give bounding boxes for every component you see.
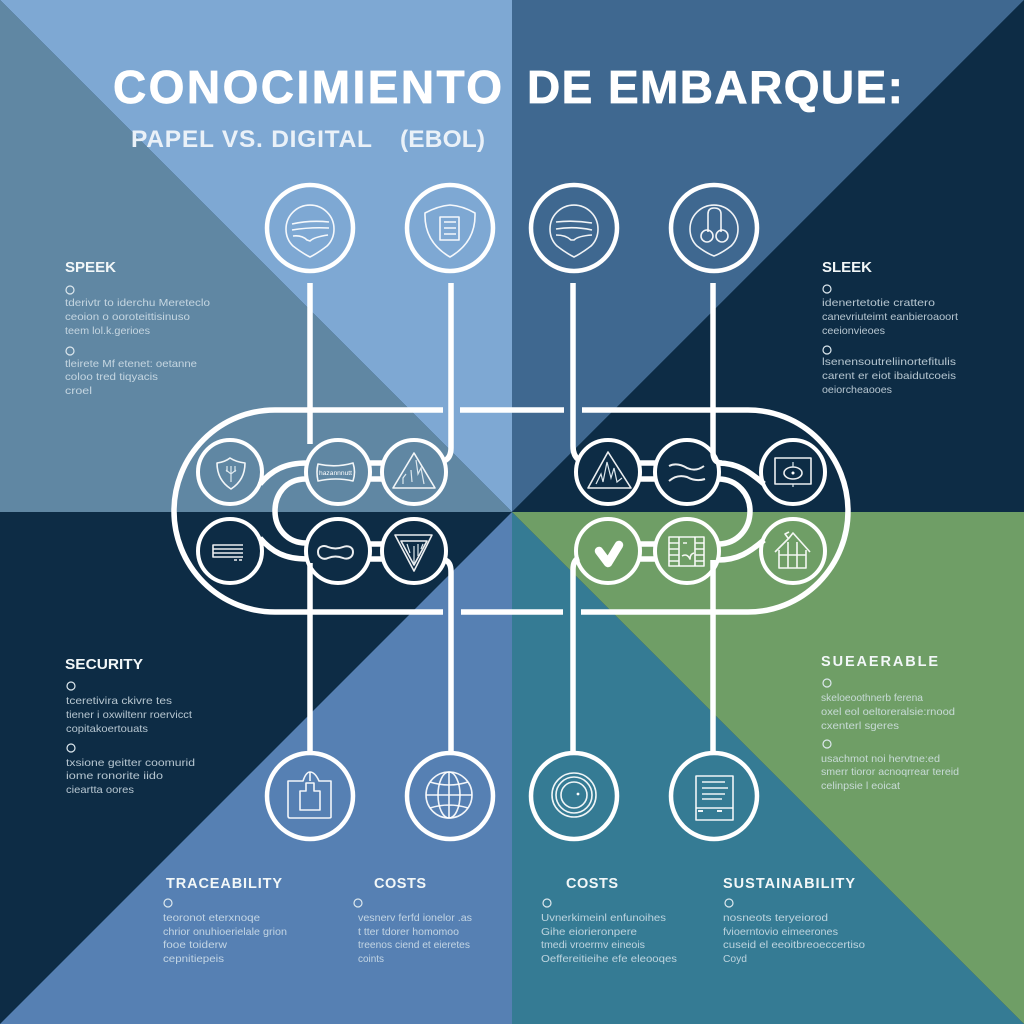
body text: nosneots teryeiorod (723, 912, 828, 924)
body text (163, 912, 287, 965)
body text (821, 692, 959, 792)
body text: tderivtr to iderchu Mereteclo (65, 297, 210, 309)
body text: teem lol.k.gerioes (65, 325, 150, 337)
heading: speek: SPEEK (65, 260, 117, 276)
heading: sleek: SLEEK (822, 260, 873, 276)
subtitle (131, 126, 485, 153)
icon: bottom circle 2, globe (407, 753, 493, 839)
inner curved links (260, 463, 764, 560)
body text (822, 297, 958, 396)
bullet icon (164, 899, 172, 907)
body text: tleirete Mf etenet: oetanne (65, 358, 197, 370)
title (113, 61, 903, 113)
body text: iome ronorite iido (66, 770, 163, 782)
body text (541, 912, 677, 965)
body text: lsenensoutreliinortefitulis (822, 356, 956, 368)
icon: circle F1, framed screen (761, 440, 825, 504)
icon: circle B2, link shape (306, 519, 370, 583)
panel: speek (65, 260, 210, 397)
icon: top circle 2, shield with document (407, 185, 493, 271)
heading: costs: COSTS (374, 876, 426, 892)
body text: cxenterl sgeres (821, 720, 899, 732)
body text: carent er eiot ibaidutcoeis (822, 370, 956, 382)
body text: smerr tioror acnoqrrear tereid (821, 766, 959, 778)
body text: Coyd (723, 953, 747, 965)
icon: bottom circle 4, document (671, 753, 757, 839)
icon: circle C2, inverted triangle (382, 519, 446, 583)
icon: top circle 3, document pin (531, 185, 617, 271)
panel: sustainability (723, 876, 865, 965)
title: CONOCIMIENTO (113, 61, 502, 113)
body text: tmedi vroermv eineois (541, 939, 645, 951)
body text: t tter tdorer homomoo (358, 926, 459, 938)
subtitle: PAPEL VS. DIGITAL (131, 126, 372, 153)
body text: ceeionvieoes (822, 325, 885, 337)
icon: circle D2, check mark (576, 519, 640, 583)
icon: circle A2, bars (198, 519, 262, 583)
bullet icon (725, 899, 733, 907)
icon: circle E1, waves (655, 440, 719, 504)
body text: treenos ciend et eieretes (358, 939, 470, 951)
bullet icons (823, 679, 831, 748)
heading: costs: COSTS (566, 876, 618, 892)
body text: croel (65, 385, 92, 397)
body text: oeiorcheaooes (822, 384, 892, 396)
icon: bottom circle 1, box on tag (267, 753, 353, 839)
body text: cepnitiepeis (163, 953, 224, 965)
icon: top circle 1, document pin (267, 185, 353, 271)
body text: cieartta oores (66, 784, 134, 796)
icon: circle C1, warning triangle (382, 440, 446, 504)
icon: circle B1, banner: hazannnutt (319, 470, 352, 477)
body text: skeloeoothnerb ferena (821, 692, 923, 704)
icon: circle B1, banner (306, 440, 370, 504)
icon: circle D1, warning triangle (576, 440, 640, 504)
body text: Uvnerkimeinl enfunoihes (541, 912, 666, 924)
body text: idenertetotie crattero (822, 297, 935, 309)
body text (358, 912, 472, 965)
body text: ceoion o ooroteittisinuso (65, 311, 190, 323)
body text: copitakoertouats (66, 723, 148, 735)
body text: fvioerntovio eimeerones (723, 926, 838, 938)
body text: usachmot noi hervtne:ed (821, 753, 940, 765)
panel: security (65, 657, 195, 796)
bullet icons (823, 285, 831, 354)
icon: bottom circle 3, concentric rings (531, 753, 617, 839)
heading: traceability: TRACEABILITY (166, 876, 282, 892)
body text: Gihe eiorieronpere (541, 926, 637, 938)
body text: celinpsie l eoicat (821, 780, 900, 792)
panel: traceability (163, 876, 287, 965)
heading: sustainability: SUSTAINABILITY (723, 876, 855, 892)
body text: chrior onuhioerielale grion (163, 926, 287, 938)
bullet icons (67, 682, 75, 752)
body text: coloo tred tiqyacis (65, 371, 158, 383)
heading: sueaerable: SUEAERABLE (821, 654, 938, 670)
panel: sleek (822, 260, 958, 396)
panel: sueaerable (821, 654, 959, 792)
body text (65, 297, 210, 397)
body text: tiener i oxwiltenr roervicct (66, 709, 192, 721)
bullet icons (66, 286, 74, 355)
body text (723, 912, 865, 965)
panel: costs left (354, 876, 472, 965)
body text: cuseid el eeoitbreoeccertiso (723, 939, 865, 951)
body text: vesnerv ferfd ionelor .as (358, 912, 472, 924)
icon: circle A1, shield (198, 440, 262, 504)
icon: circle F2, house (761, 519, 825, 583)
vertical links to top and bottom icons (310, 283, 722, 752)
central connector network (174, 283, 848, 752)
bullet icon (354, 899, 362, 907)
subtitle: (EBOL) (400, 126, 485, 153)
body text: teoronot eterxnoqe (163, 912, 260, 924)
title: DE EMBARQUE: (527, 61, 903, 113)
outer pill track (174, 410, 848, 612)
body text: tceretivira ckivre tes (66, 695, 172, 707)
body text: canevriuteimt eanbieroaoort (822, 311, 958, 323)
icon: top circle 4, pin with linked rings (671, 185, 757, 271)
body text: fooe toiderw (163, 939, 227, 951)
icon: circle E2, film frame (655, 519, 719, 583)
panel: costs right (541, 876, 677, 965)
body text: coints (358, 953, 384, 965)
heading: security: SECURITY (65, 657, 143, 673)
body text: oxel eol oeltoreralsie:rnood (821, 706, 955, 718)
body text (66, 695, 195, 796)
bullet icon (543, 899, 551, 907)
body text: Oeffereitieihe efe eleooqes (541, 953, 677, 965)
body text: txsione geitter coomurid (66, 757, 195, 769)
